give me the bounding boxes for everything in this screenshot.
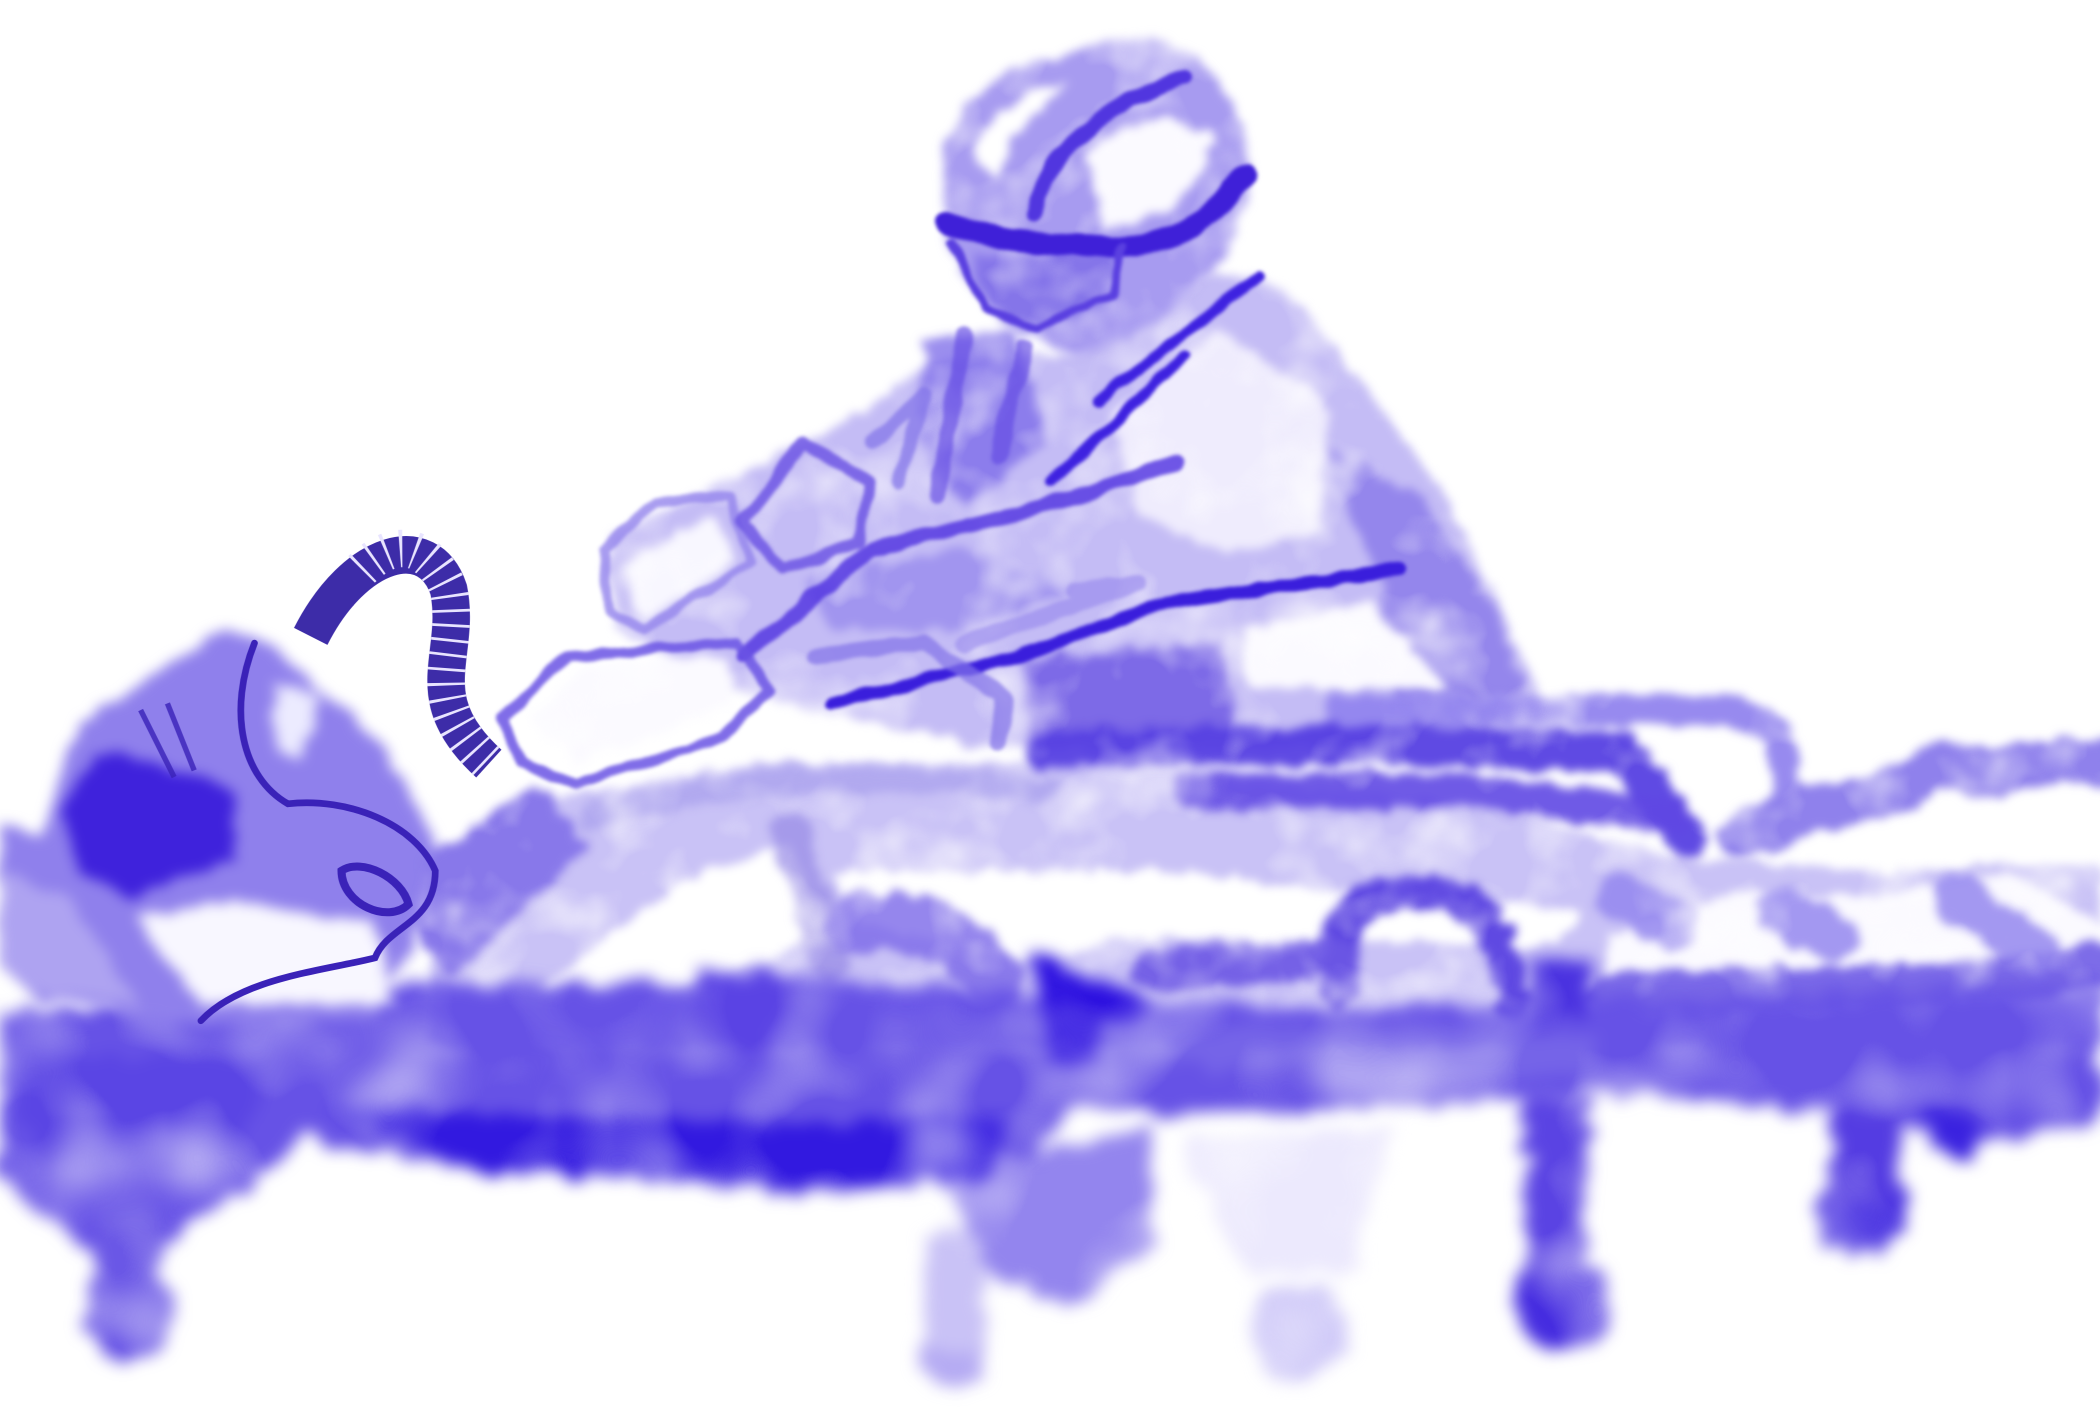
helmet straps and goggles [944,78,1246,328]
helmet [944,38,1250,355]
patient bed blanket wash [429,764,2100,1045]
patient face [0,626,442,1025]
bed frame strokes [589,710,2100,1005]
patient head and oxygen mask [0,548,589,1025]
arms and gloves [502,275,1400,784]
mask outline [201,643,435,1021]
health worker body wash [529,275,1540,764]
neck and chest wash [415,784,589,978]
oxygen tube [311,548,489,764]
mattress band and drips [0,954,2100,1388]
